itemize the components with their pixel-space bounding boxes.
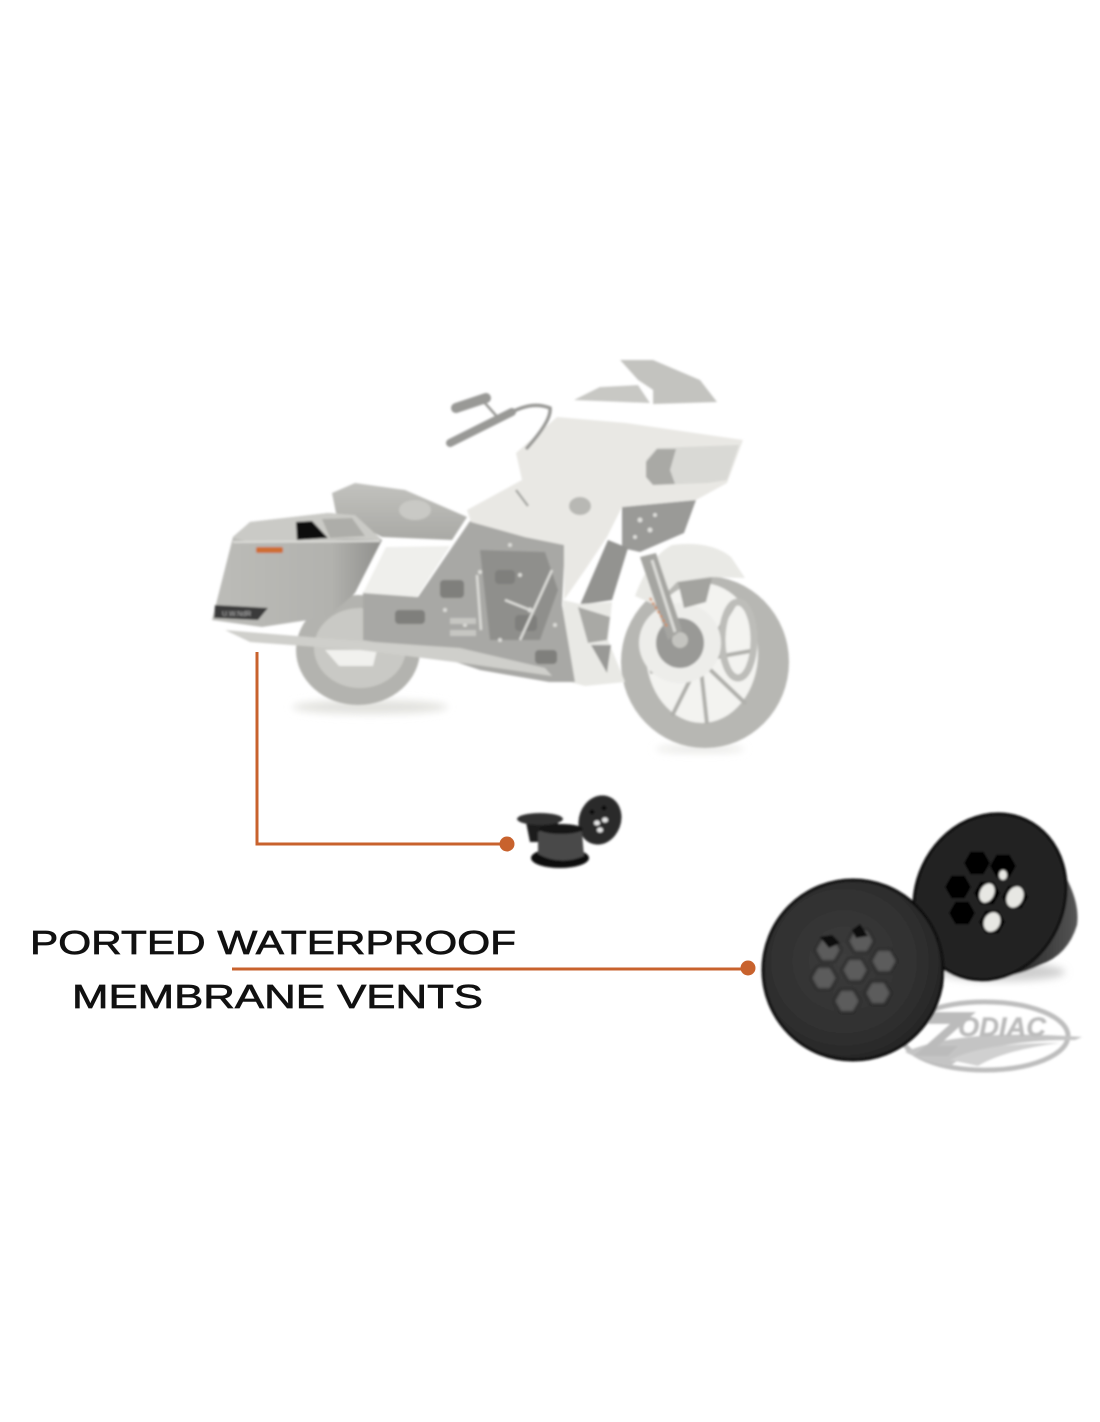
headlight (646, 445, 739, 485)
saddlebag (212, 513, 382, 627)
rear wheel (296, 595, 420, 705)
large vents photo (763, 789, 1093, 1060)
connector line: title to large vents (232, 968, 748, 970)
fender inner (678, 578, 712, 608)
saddlebag: U.W.NdR (222, 611, 251, 618)
motorcycle illustration (212, 360, 789, 752)
small vent: front cup (531, 824, 589, 868)
fairing mirror stub (569, 497, 591, 515)
title line 1: PORTED WATERPROOF (30, 924, 516, 961)
front brake rotor (722, 602, 754, 678)
large vent: rear cap (887, 789, 1093, 1005)
exhaust pipes (225, 630, 552, 676)
lower fairing vent (591, 645, 611, 673)
fork brace highlights (633, 513, 657, 539)
callout title (30, 924, 516, 1015)
small vent: left cup (517, 813, 563, 842)
connector dot: large vents (740, 960, 756, 976)
side panel (363, 546, 450, 597)
fairing lower dark strip (580, 540, 628, 605)
fairing vent mark (516, 490, 528, 506)
small vents photo (517, 789, 628, 868)
small vent: rear disc (572, 789, 628, 851)
front fender (635, 544, 745, 605)
front fork (640, 553, 682, 640)
ground shadows (292, 700, 745, 752)
connector dot: small vents (500, 836, 514, 852)
zodiac watermark logo: ODIAC (958, 1012, 1047, 1042)
fork brace (622, 500, 696, 552)
handlebars and mirror (450, 398, 550, 448)
title line 2: MEMBRANE VENTS (72, 978, 483, 1015)
zodiac watermark logo (902, 1002, 1082, 1070)
lower fairing insert (578, 607, 610, 643)
front fairing (467, 417, 743, 600)
windshield (574, 360, 717, 404)
front wheel (621, 576, 789, 748)
seat (332, 483, 467, 540)
large vent: front cap (763, 880, 943, 1060)
large vent: shadow (941, 963, 1065, 981)
connector line: bike to small vents (257, 652, 507, 844)
engine (363, 521, 575, 682)
lower fairing panel (562, 600, 625, 686)
